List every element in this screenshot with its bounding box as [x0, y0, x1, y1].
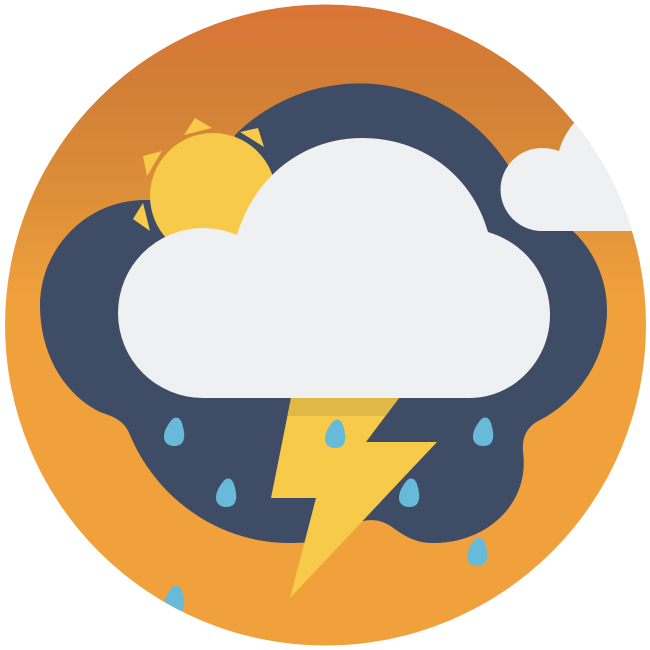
sun — [133, 118, 272, 237]
sun ray upper right — [240, 128, 264, 147]
raindrop 2 — [325, 420, 345, 448]
main white cloud — [118, 138, 550, 398]
sun ray upper left — [143, 151, 162, 176]
clipped scene — [40, 83, 650, 614]
raindrop 7 — [164, 586, 184, 614]
raindrop 3 — [473, 418, 493, 446]
raindrop 6 — [467, 538, 487, 566]
raindrop 5 — [399, 478, 419, 507]
lightning bolt — [271, 398, 437, 598]
small cloud — [500, 123, 632, 231]
sun ray lower left — [133, 203, 150, 231]
sun disc — [150, 133, 272, 237]
raindrop 1 — [164, 418, 184, 446]
raindrop 4 — [216, 478, 236, 507]
sun ray top — [184, 118, 212, 135]
bolt shadow band — [288, 398, 399, 416]
dark storm cloud — [40, 83, 607, 543]
raindrops — [164, 418, 493, 614]
